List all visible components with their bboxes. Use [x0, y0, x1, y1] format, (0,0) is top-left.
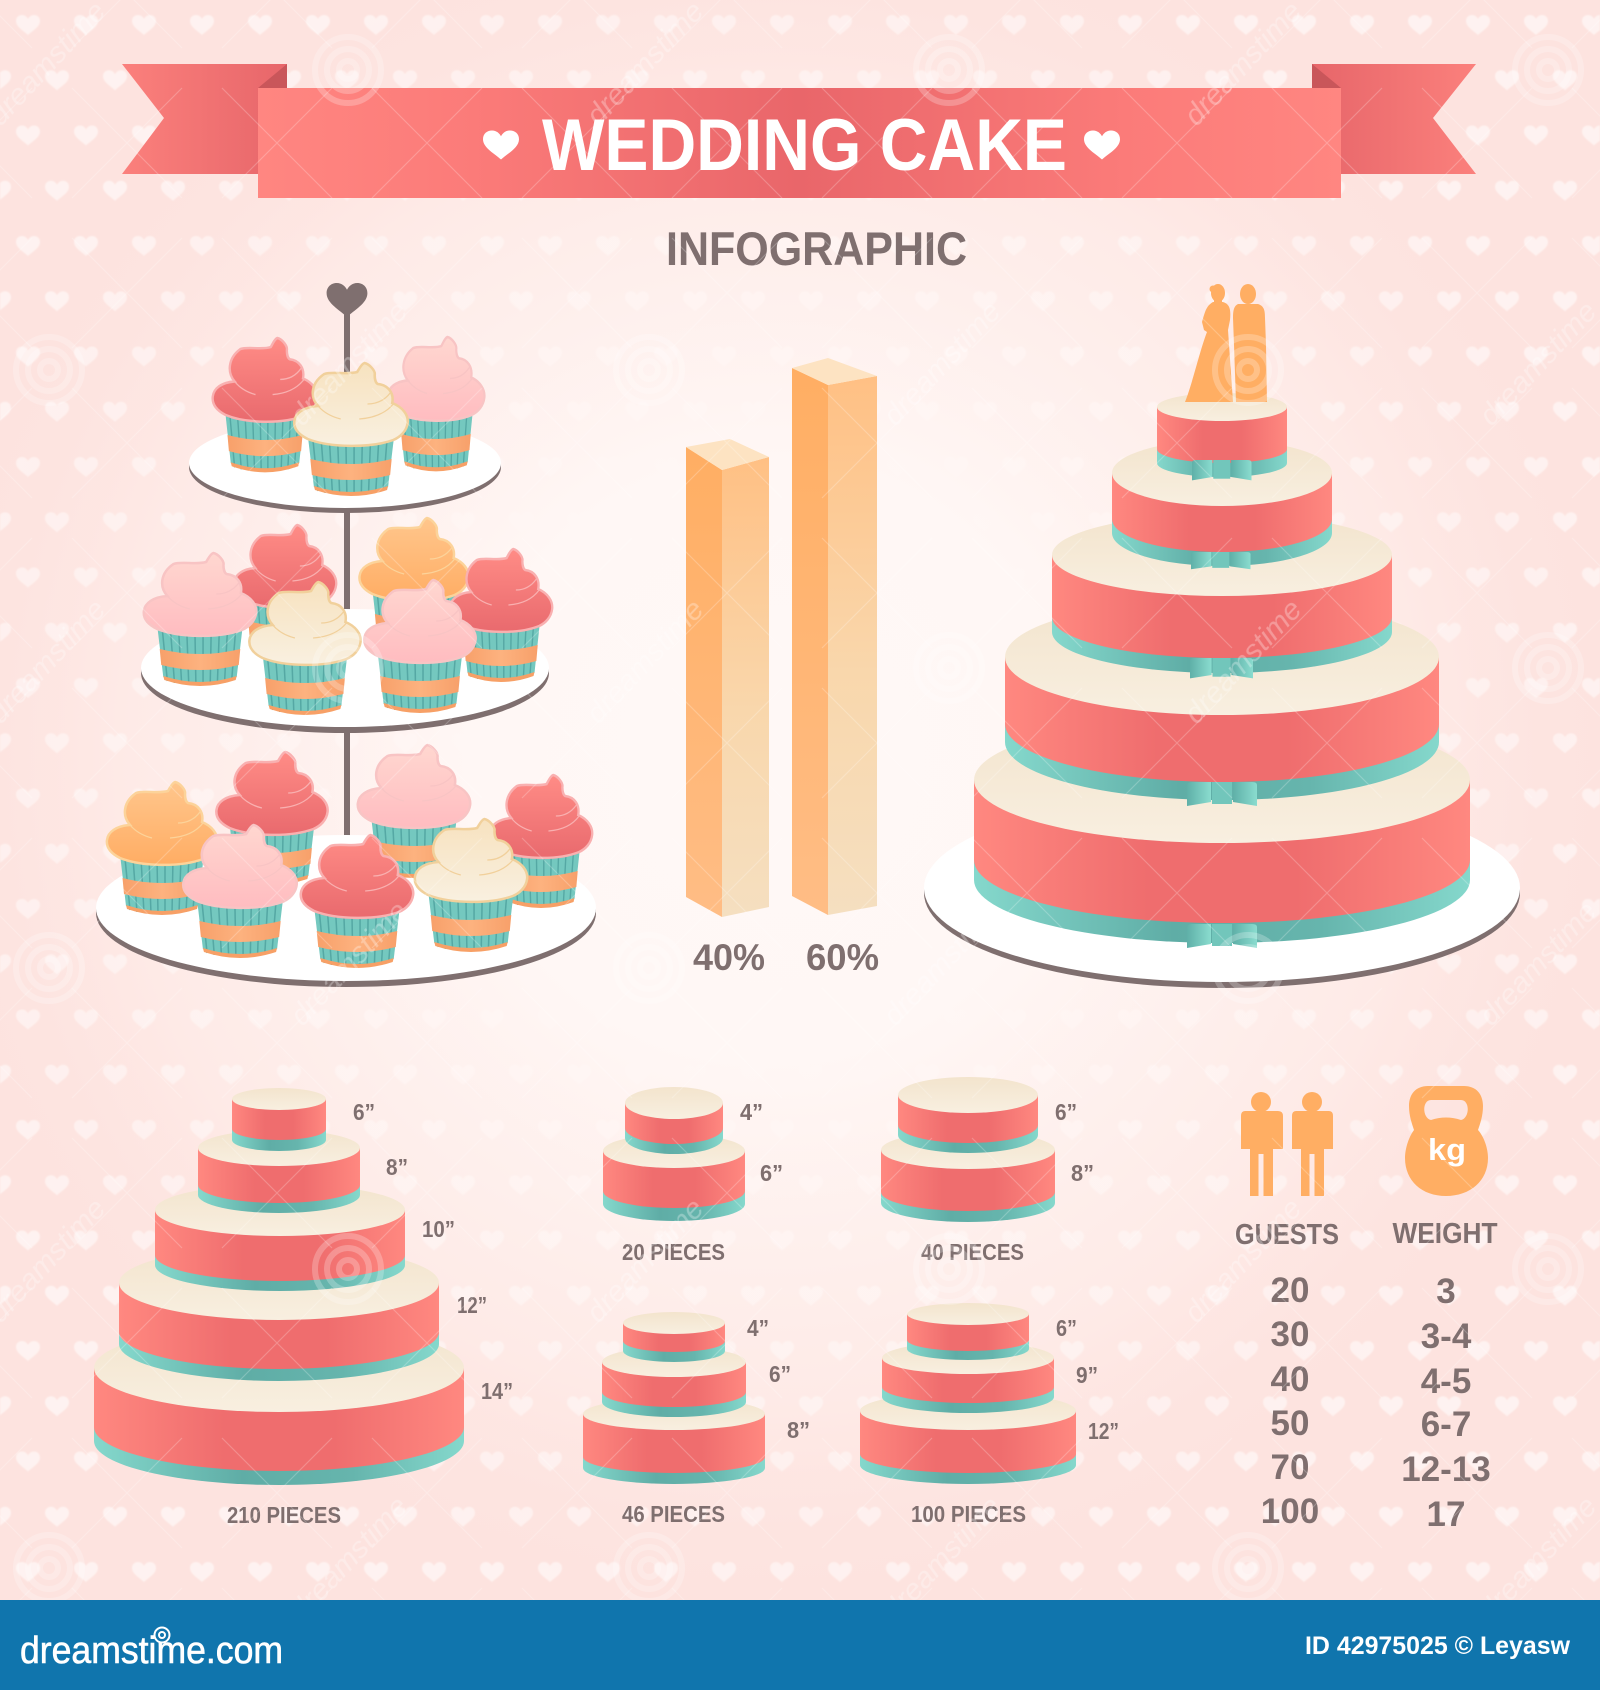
watermark text: dreamstime [877, 1490, 1008, 1627]
weight column: 4-5 [1421, 1362, 1471, 1401]
guests column: 70 [1271, 1448, 1309, 1487]
icon: right heart [1084, 130, 1120, 160]
watermark text: dreamstime [1473, 895, 1600, 1032]
stand pole middle [344, 510, 350, 620]
icon: bride and groom topper [1185, 284, 1267, 402]
pieces label: 20 PIECES [622, 1239, 725, 1265]
size labels: 4” [747, 1315, 769, 1341]
size labels: 12” [457, 1292, 487, 1318]
weight column: 3-4 [1421, 1317, 1472, 1356]
ribbon right tail [1312, 64, 1476, 174]
size labels: 6” [1056, 1315, 1077, 1341]
3D bar chart [686, 358, 879, 978]
cake size: 210 pieces [94, 1088, 513, 1528]
stand pole top [344, 310, 350, 380]
guests column: 50 [1271, 1404, 1309, 1443]
cake size: 40 pieces [881, 1077, 1094, 1265]
watermark text: dreamstime [284, 295, 415, 432]
pieces label: 100 PIECES [911, 1501, 1026, 1527]
label 60%: 60% [806, 937, 879, 978]
watermark text: dreamstime [1473, 295, 1600, 432]
footer logo: dreamstime.com [20, 1630, 283, 1672]
size labels: 8” [1071, 1160, 1094, 1186]
weight column: WEIGHT [1392, 1218, 1498, 1250]
guests column: 40 [1271, 1360, 1309, 1399]
tier 4 [1112, 440, 1332, 569]
large tiered wedding cake [924, 284, 1520, 988]
size labels: 6” [769, 1361, 791, 1387]
pieces label: 210 PIECES [227, 1502, 341, 1528]
watermark text: dreamstime [284, 1490, 415, 1627]
size labels [1055, 1099, 1094, 1186]
size labels: 4” [740, 1099, 763, 1125]
size labels [353, 1099, 513, 1404]
pieces label: 40 PIECES [921, 1239, 1024, 1265]
watermark text: dreamstime [580, 1192, 711, 1329]
guests column: 100 [1261, 1492, 1319, 1531]
guests column: GUESTS [1235, 1219, 1339, 1251]
middle plate [141, 609, 549, 733]
bar 40 percent [686, 439, 769, 917]
icon: guests [1241, 1092, 1333, 1196]
weight column: 12-13 [1401, 1450, 1491, 1489]
weight column: 17 [1427, 1495, 1465, 1534]
bottom plate [96, 835, 596, 987]
watermark text: dreamstime [1473, 1490, 1600, 1627]
watermark text: dreamstime [877, 295, 1008, 432]
watermark text: dreamstime [580, 593, 711, 730]
pieces label: 46 PIECES [622, 1501, 725, 1527]
stand pole lower [344, 730, 350, 845]
icon: kettlebell weight [1405, 1086, 1488, 1196]
watermark text: dreamstime [877, 895, 1008, 1032]
size labels: 6” [1055, 1099, 1077, 1125]
bottom tier cupcakes [107, 745, 592, 968]
ribbon banner [122, 64, 1476, 198]
footer bar [0, 1600, 1600, 1690]
middle tier cupcakes [144, 518, 552, 715]
size labels: 10” [422, 1216, 455, 1242]
cake size: 46 pieces [583, 1312, 810, 1527]
size labels [740, 1099, 783, 1186]
icon: stand heart topper [327, 283, 367, 317]
watermark text: dreamstime [1178, 1192, 1309, 1329]
weight column: 6-7 [1421, 1405, 1471, 1444]
watermark text: dreamstime [284, 895, 415, 1032]
tier 1 [974, 717, 1470, 948]
size labels: 12” [1088, 1418, 1119, 1444]
cupcake stand [96, 283, 596, 987]
size labels [747, 1315, 810, 1443]
guests column: 20 [1271, 1271, 1309, 1310]
subtitle: INFOGRAPHIC [666, 222, 967, 275]
tier 5 [1157, 393, 1287, 480]
guests column [1235, 1219, 1339, 1531]
top plate [189, 418, 501, 513]
ribbon front band [258, 88, 1341, 198]
title: WEDDING CAKE [542, 105, 1067, 186]
size labels: 8” [787, 1417, 810, 1443]
watermark text: dreamstime [1178, 593, 1309, 730]
icon: left heart [483, 130, 519, 160]
size labels: 6” [353, 1099, 375, 1125]
ribbon left tail [122, 64, 287, 174]
weight column: 3 [1436, 1272, 1456, 1311]
tier 3 [1052, 514, 1392, 678]
footer image id: ID 42975025 © Leyasw [1305, 1632, 1571, 1660]
size labels [1056, 1315, 1119, 1444]
size labels: 6” [760, 1160, 783, 1186]
weight column [1392, 1218, 1498, 1534]
size labels: 8” [386, 1154, 408, 1180]
icon: kettlebell weight: kg [1428, 1132, 1466, 1167]
guests column: 30 [1271, 1315, 1309, 1354]
label 40%: 40% [693, 937, 765, 978]
cake board [924, 794, 1520, 988]
cake size: 100 pieces [860, 1303, 1119, 1527]
cake size: 20 pieces [603, 1087, 783, 1265]
size labels: 14” [481, 1378, 513, 1404]
bar 60 percent [792, 358, 877, 915]
top tier cupcakes [213, 337, 484, 496]
tier 2 [1005, 599, 1439, 806]
size labels: 9” [1076, 1362, 1098, 1388]
